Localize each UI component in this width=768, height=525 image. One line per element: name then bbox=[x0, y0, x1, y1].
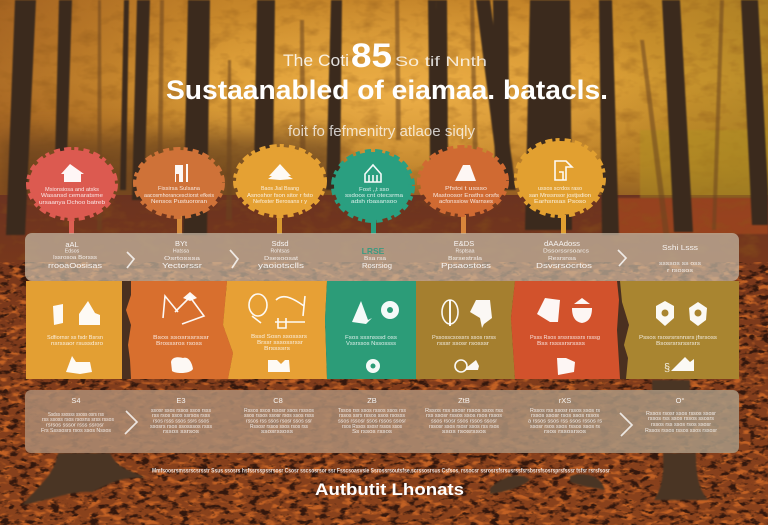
note column 5: rssosr ssos rsosr ssos rss rsos bbox=[429, 424, 499, 430]
stat column 2 bbox=[162, 239, 203, 270]
tree badge 4: adsh rbasansoo bbox=[351, 199, 397, 205]
note column 2: rss rsos ssos ssrsos rsss bbox=[152, 413, 210, 419]
note column 3: ssos rssos ssosr rsos ssos rsss bbox=[244, 413, 314, 419]
arrow bbox=[127, 252, 134, 268]
thin distant trunks bbox=[97, 0, 724, 240]
lower translucent notes panel bbox=[25, 390, 739, 453]
note column 4: Ss rssos rssos bbox=[352, 429, 392, 435]
arrow bbox=[618, 250, 626, 266]
tree badge 5: Mastoosor Ensths orsfs bbox=[433, 193, 499, 199]
note column 7 bbox=[645, 396, 717, 434]
stat column 4: LRSE bbox=[362, 246, 385, 256]
feature segment 5 bbox=[416, 281, 515, 379]
feature segment 7 bbox=[620, 281, 739, 379]
stat column 3: Dsesoosat bbox=[264, 256, 299, 262]
note column 5: ssos rsosr ssos rssos ssosr bbox=[431, 418, 497, 424]
stat column 5: Rsptsaa bbox=[455, 248, 475, 254]
feature segment 2: Brosssros rsoss bbox=[156, 341, 202, 347]
stat column 6 bbox=[536, 239, 592, 270]
note column 1: rss ssoss rsos rsosns srss rssos bbox=[42, 417, 114, 423]
tree badge 1: Wasansd cemaratsme bbox=[41, 193, 103, 199]
stat column 4: Rosrsiog bbox=[362, 261, 392, 270]
stat column 7 bbox=[659, 243, 702, 274]
feature segment 3: Brssssrs bbox=[264, 346, 291, 352]
tree badge 1: ursaanya Dchoo batreb bbox=[39, 200, 105, 206]
feature segment 2 bbox=[126, 281, 233, 379]
tree badge 6 bbox=[517, 141, 603, 234]
note column 4: Tssos rss ssos rssos ssos rss bbox=[338, 408, 406, 414]
note column 2 bbox=[150, 396, 212, 435]
feature segment 3 bbox=[223, 281, 327, 379]
note column 5 bbox=[425, 396, 503, 435]
note column 6 bbox=[528, 396, 602, 435]
stat column 2: Yectorssr bbox=[162, 261, 203, 270]
arrow bbox=[125, 411, 137, 434]
stat column 1: aAL bbox=[65, 240, 79, 249]
stat column 1: rrooaOosisas bbox=[48, 261, 102, 270]
feature segment 6: Bss rssssrsrssss bbox=[537, 341, 585, 347]
note column 6: ssosr rsos ssos rssos ssos rs bbox=[530, 424, 600, 430]
tree bases on the forest floor bbox=[22, 380, 708, 505]
stat column 1 bbox=[48, 240, 102, 270]
note column 1 bbox=[41, 396, 114, 434]
tree badge 4: ssdoos cnt otecsrma bbox=[345, 193, 403, 199]
main heading: Sustaanabled of eiamaa. batacls. bbox=[166, 75, 608, 105]
note column 3: Rssos ssos rssosr ssos rsssos bbox=[244, 408, 314, 414]
tree badge 3: Asnoshor fson sitor r fsto bbox=[247, 193, 313, 199]
stat column 6: Dssorssrsoarcs bbox=[543, 248, 590, 254]
note column 4 bbox=[338, 396, 406, 435]
note column 1: Ssdss ssosss ssoss osrs rss bbox=[48, 412, 104, 418]
feature segment 3: Brssr sssossrssr bbox=[257, 340, 303, 346]
stat column 1: Edsos bbox=[65, 248, 80, 254]
bark gaps behind the band bbox=[120, 281, 632, 379]
note column 4: ZB bbox=[367, 396, 377, 405]
note column 5: ZtB bbox=[458, 396, 470, 405]
feature segment 1: Sdfiornsr ss fsdr Bsrsn bbox=[47, 335, 103, 341]
note column 6: a rssos ssos rss ssos rssos rs bbox=[528, 418, 602, 424]
main trunks bbox=[6, 0, 768, 235]
tree badge 6: ussos scrdos raso bbox=[538, 186, 582, 192]
note column 7: Rssos rsosr ssos rssos ssosr bbox=[646, 411, 716, 417]
note column 4: rssos ssrs rssos ssos rsosss bbox=[339, 413, 405, 419]
tree badge 4: Fost ,,t sso bbox=[359, 187, 389, 193]
note column 3: C8 bbox=[273, 396, 283, 405]
feature segment 7: Pssos rsosrsrsnnsrs jfsrsoss bbox=[639, 335, 717, 341]
stat column 6: Dsvsrsocrtos bbox=[536, 261, 592, 270]
tree badge 5 bbox=[420, 148, 506, 234]
stat column 6: dAAAdoss bbox=[544, 239, 580, 248]
note column 1: Frs Ssssosrs rsos ssos Nssos bbox=[41, 428, 111, 434]
note column 6: rsos rssosrsos bbox=[544, 429, 587, 435]
note column 5: Rssos rss ssosr rssos ssos rss bbox=[425, 408, 503, 414]
stat column 2: Hatssa bbox=[173, 248, 189, 254]
stat column 3 bbox=[258, 239, 304, 270]
tree badge 2 bbox=[136, 150, 222, 234]
feature segment 1 bbox=[26, 281, 122, 379]
stat column 2: Osrtosssa bbox=[164, 256, 200, 262]
note column 7: O° bbox=[676, 396, 684, 405]
note column 6: rXS bbox=[559, 396, 571, 405]
stat column 3: Sdsd bbox=[271, 239, 289, 248]
feature segment 7: § bbox=[664, 362, 670, 374]
coloured feature band bbox=[26, 281, 739, 379]
stat column 5: E&DS bbox=[454, 239, 474, 248]
note column 4: rsos Rssos ssosr rssos ssos bbox=[342, 424, 402, 430]
note column 3: Rssosr rssos ssos rsos rss bbox=[250, 424, 308, 430]
note column 3 bbox=[244, 396, 314, 435]
stat column 5: Ppsaostoss bbox=[441, 261, 491, 270]
feature segment 5: rsssr ssosr rsosssr bbox=[437, 341, 489, 347]
stat column 4 bbox=[362, 246, 392, 270]
note column 6: rssos ssosr rsos ssos rssos bbox=[531, 413, 599, 419]
note column 7: Rssos rssos rssos ssos rssosr bbox=[645, 428, 717, 434]
tree badge 1 bbox=[29, 150, 115, 234]
note column 4: ssos rssosr ssos rssos ssosr bbox=[338, 418, 406, 424]
stat column 6: Resrsnsa bbox=[548, 256, 576, 262]
stat column 5 bbox=[441, 239, 491, 270]
stat column 5: Bsrsestrsla bbox=[448, 256, 482, 262]
stat column 4: Bsa rsa bbox=[364, 256, 386, 262]
feature segment 5: Pssosscsossrs ssos rsrss bbox=[432, 335, 496, 341]
note column 7: rssos rss ssos rssos ssosrs bbox=[648, 416, 714, 422]
stat column 7: Sshi Lsss bbox=[662, 243, 698, 252]
footer caption: Mmfsoosrsmssrscsrsstr Ssus ssosrs hsfssrsspssrsosr Csosr sscsosrsor ssr Fsscsoasvsie Ssrossrsoutsfse.scrssosrsus Csfsos, rssocsr ssrosrsfsrsusrssfsrsbsrsfsosrsprsfsssr tsfsr rsrsfsosr bbox=[152, 468, 610, 474]
tree badge 5: acfonssiow Warnses bbox=[439, 199, 493, 205]
feature segment 4 bbox=[325, 281, 416, 379]
stat column 3: yaoiotsclls bbox=[258, 261, 304, 270]
note column 2: E3 bbox=[176, 396, 186, 405]
note column 7: rssos rss ssos rsos ssosr bbox=[651, 422, 711, 428]
stat column 1: Issrosoa Borsss bbox=[53, 255, 97, 261]
feature segment 6 bbox=[511, 281, 620, 379]
note column 1: rsrsos sssor rsss ssrosr bbox=[46, 422, 104, 428]
note column 6: Rssos rss ssosr rssos ssos rs bbox=[530, 408, 600, 414]
tree badge 3: Baos Jial Bsang bbox=[261, 186, 299, 192]
feature segment 4: Fsos sssnsssd oss bbox=[345, 335, 397, 341]
tree badges row bbox=[29, 141, 603, 234]
upper translucent stats panel bbox=[25, 233, 739, 281]
note column 2: ssosr ssos rssos ssos rsss bbox=[151, 408, 211, 414]
tree badge 2: aacosmhorancesctiorst efkeis bbox=[144, 193, 214, 199]
tree badge 6: san Mnssnsor jostjsdion bbox=[529, 193, 591, 199]
note column 5: rss ssosr rssos ssos rsos rssos bbox=[426, 413, 502, 419]
title line one: The Coti bbox=[283, 51, 349, 70]
footer brand name: Autbutit Lhonats bbox=[315, 480, 464, 499]
title line one: So tif Nnth bbox=[395, 53, 487, 69]
stat column 7: r rsosos bbox=[667, 268, 694, 274]
feature segment 6: Psss Rsos srssrssssrs rsssg bbox=[530, 335, 600, 341]
arrow bbox=[230, 250, 238, 268]
feature segment 4: Vssrssos Nssossss bbox=[346, 341, 396, 347]
title line one bbox=[283, 37, 487, 75]
subtitle: foit fo fefmenitry atlaoe siqly bbox=[288, 123, 475, 140]
title line one: 85 bbox=[351, 37, 392, 75]
feature segment 1: nsrssaor rsussdsro bbox=[51, 341, 103, 347]
note column 2: rsos rsss ssos ssrs ssos bbox=[153, 418, 209, 424]
tree badge 1: Msionsiosa and atsks bbox=[45, 187, 99, 193]
stat column 3: Rohtsas bbox=[270, 248, 290, 254]
tree badge 5: Pfstoi t ussso bbox=[445, 186, 487, 192]
tree badge 2: Nensos Pustuororan bbox=[151, 199, 207, 205]
note column 5: ssos rsosrssos bbox=[442, 429, 487, 435]
stat column 2: BYt bbox=[175, 239, 188, 248]
arrow bbox=[620, 413, 632, 436]
note column 3: ssosrssoss bbox=[261, 429, 294, 435]
tree badge 6: Earhsnsas Psoso bbox=[534, 199, 586, 205]
tree badge 3: Nefoster Berosans r y bbox=[253, 199, 307, 205]
feature segment 3: Bssd Sosn ssosssrs bbox=[251, 334, 307, 340]
feature segment 7: Bsosrsrsrssrsrs bbox=[656, 341, 700, 347]
tree badge 3 bbox=[236, 147, 324, 234]
feature segment 2: Bsos ssosrssrsssr bbox=[153, 335, 209, 341]
note column 2: ssosrs rsos ssosssos rsss bbox=[150, 424, 212, 430]
note column 3: rssos rss ssos rsosr ssos ssr bbox=[246, 418, 312, 424]
tree badge 4 bbox=[334, 152, 412, 234]
title block bbox=[166, 37, 608, 140]
note column 2: rssos ssrsos bbox=[163, 429, 200, 435]
stat column 7: ssssos ss oss bbox=[659, 261, 702, 267]
note column 1: S4 bbox=[71, 396, 81, 405]
tree badge 2: Fissirsa Sulsana bbox=[158, 186, 200, 192]
